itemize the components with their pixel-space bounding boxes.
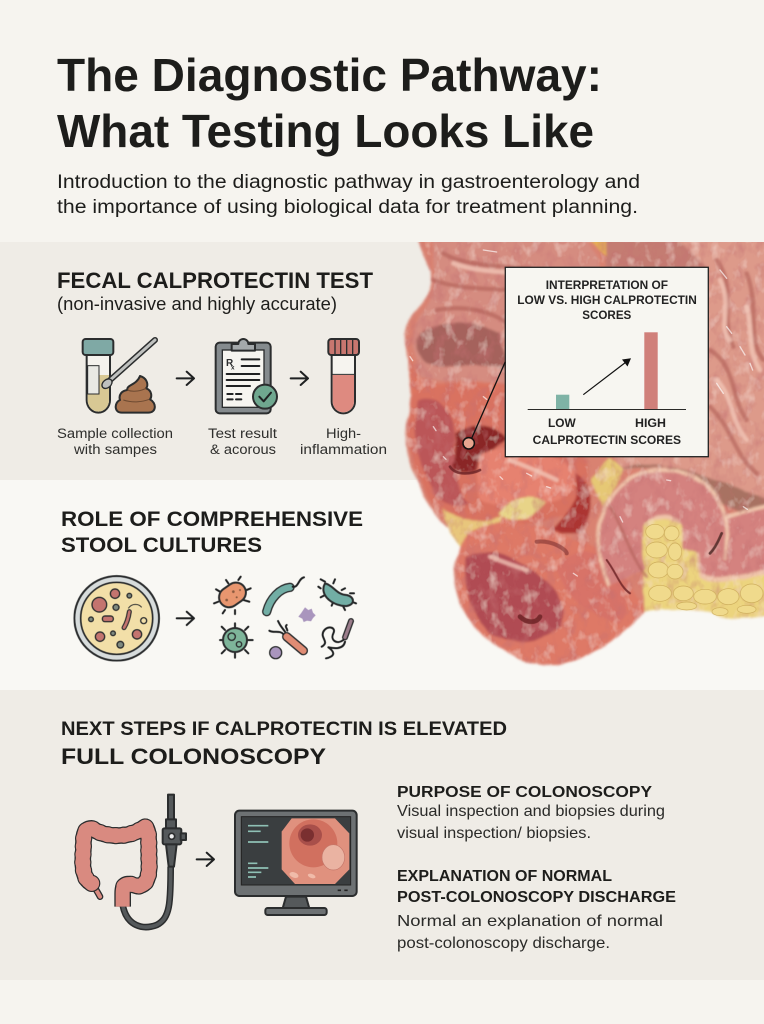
- chart labels: LOW: [548, 416, 576, 430]
- heading: stool cultures: ROLE OF COMPREHENSIVE: [61, 508, 363, 531]
- heading: next steps: [61, 719, 507, 769]
- text block: purpose of colonoscopy: visual inspection/ biopsies.: [397, 825, 591, 842]
- chart labels: HIGH: [635, 416, 666, 430]
- heading: stool cultures: STOOL CULTURES: [61, 534, 262, 557]
- icon: clipboard with test result: [216, 339, 277, 413]
- heading: next steps: NEXT STEPS IF CALPROTECTIN IS ELEVATED: [61, 719, 507, 740]
- heading: fecal calprotectin test: [57, 268, 374, 314]
- title: [57, 49, 602, 157]
- icon: monitor with endoscopic view: [235, 811, 357, 915]
- arrow: [177, 372, 194, 385]
- callout heading: LOW VS. HIGH CALPROTECTIN: [517, 293, 697, 307]
- heading: next steps: FULL COLONOSCOPY: [61, 744, 326, 769]
- captions: test steps: [57, 426, 387, 457]
- callout heading: SCORES: [582, 308, 631, 322]
- arrow: [197, 853, 214, 866]
- icon: petri dish: [74, 576, 159, 661]
- title: The Diagnostic Pathway:: [57, 49, 602, 101]
- text block: purpose of colonoscopy: [397, 784, 665, 842]
- icon: clipboard with test result: x: [231, 364, 235, 371]
- chart labels: [533, 416, 681, 447]
- text block: normal discharge explanation: EXPLANATION OF NORMAL: [397, 868, 612, 885]
- creases and highlights: [410, 250, 763, 622]
- arrow: [177, 612, 194, 625]
- heading: stool cultures: [61, 508, 363, 557]
- icon: clipboard with test result: R: [226, 358, 233, 369]
- arrow: rising trend: [583, 358, 631, 395]
- arrow: [291, 372, 308, 385]
- title: What Testing Looks Like: [57, 105, 594, 157]
- text block: purpose of colonoscopy: Visual inspection and biopsies during: [397, 803, 665, 820]
- callout leader line and marker: [463, 362, 505, 449]
- icon: sample tube with swab and stool: [83, 339, 155, 413]
- captions: test steps: with sampes: [73, 442, 157, 457]
- callout heading: INTERPRETATION OF: [546, 278, 668, 292]
- captions: test steps: High-: [326, 426, 361, 441]
- band: next steps section: [0, 690, 764, 980]
- chart labels: CALPROTECTIN SCORES: [533, 433, 681, 447]
- text block: normal discharge explanation: POST-COLONOSCOPY DISCHARGE: [397, 889, 676, 906]
- heading: fecal calprotectin test: FECAL CALPROTECTIN TEST: [57, 268, 374, 293]
- icon: colon with endoscope: [83, 795, 186, 927]
- bar: low score: [556, 395, 569, 410]
- fold shading: [433, 253, 763, 577]
- icon row: stool culture: [74, 576, 356, 661]
- bar: high score: [644, 332, 658, 410]
- band: fecal calprotectin section: [0, 242, 764, 480]
- text block: normal discharge explanation: Normal an explanation of normal: [397, 913, 663, 930]
- chart axis: [528, 408, 686, 410]
- text block: normal discharge explanation: [397, 868, 676, 952]
- captions: test steps: inflammation: [300, 442, 387, 457]
- text block: normal discharge explanation: post-colonoscopy discharge.: [397, 935, 610, 952]
- heading: fecal calprotectin test: (non-invasive and highly accurate): [57, 294, 337, 314]
- icon row: test steps: [83, 339, 359, 413]
- illustration: inflamed intestinal tissue: [404, 240, 764, 665]
- intro text: the importance of using biological data for treatment planning.: [57, 197, 638, 218]
- intro text: [57, 172, 640, 218]
- captions: test steps: & acorous: [210, 442, 276, 457]
- intro text: Introduction to the diagnostic pathway in gastroenterology and: [57, 172, 640, 193]
- icon: bacteria group: [214, 577, 356, 659]
- band: stool cultures section: [0, 480, 764, 690]
- callout: calprotectin score chart: [505, 267, 708, 457]
- captions: test steps: Test result: [208, 426, 277, 441]
- callout heading: [517, 278, 697, 322]
- captions: test steps: Sample collection: [57, 426, 173, 441]
- icon row: colonoscopy: [83, 795, 357, 927]
- icon: high inflammation tube: [328, 339, 359, 413]
- text block: purpose of colonoscopy: PURPOSE OF COLONOSCOPY: [397, 784, 652, 801]
